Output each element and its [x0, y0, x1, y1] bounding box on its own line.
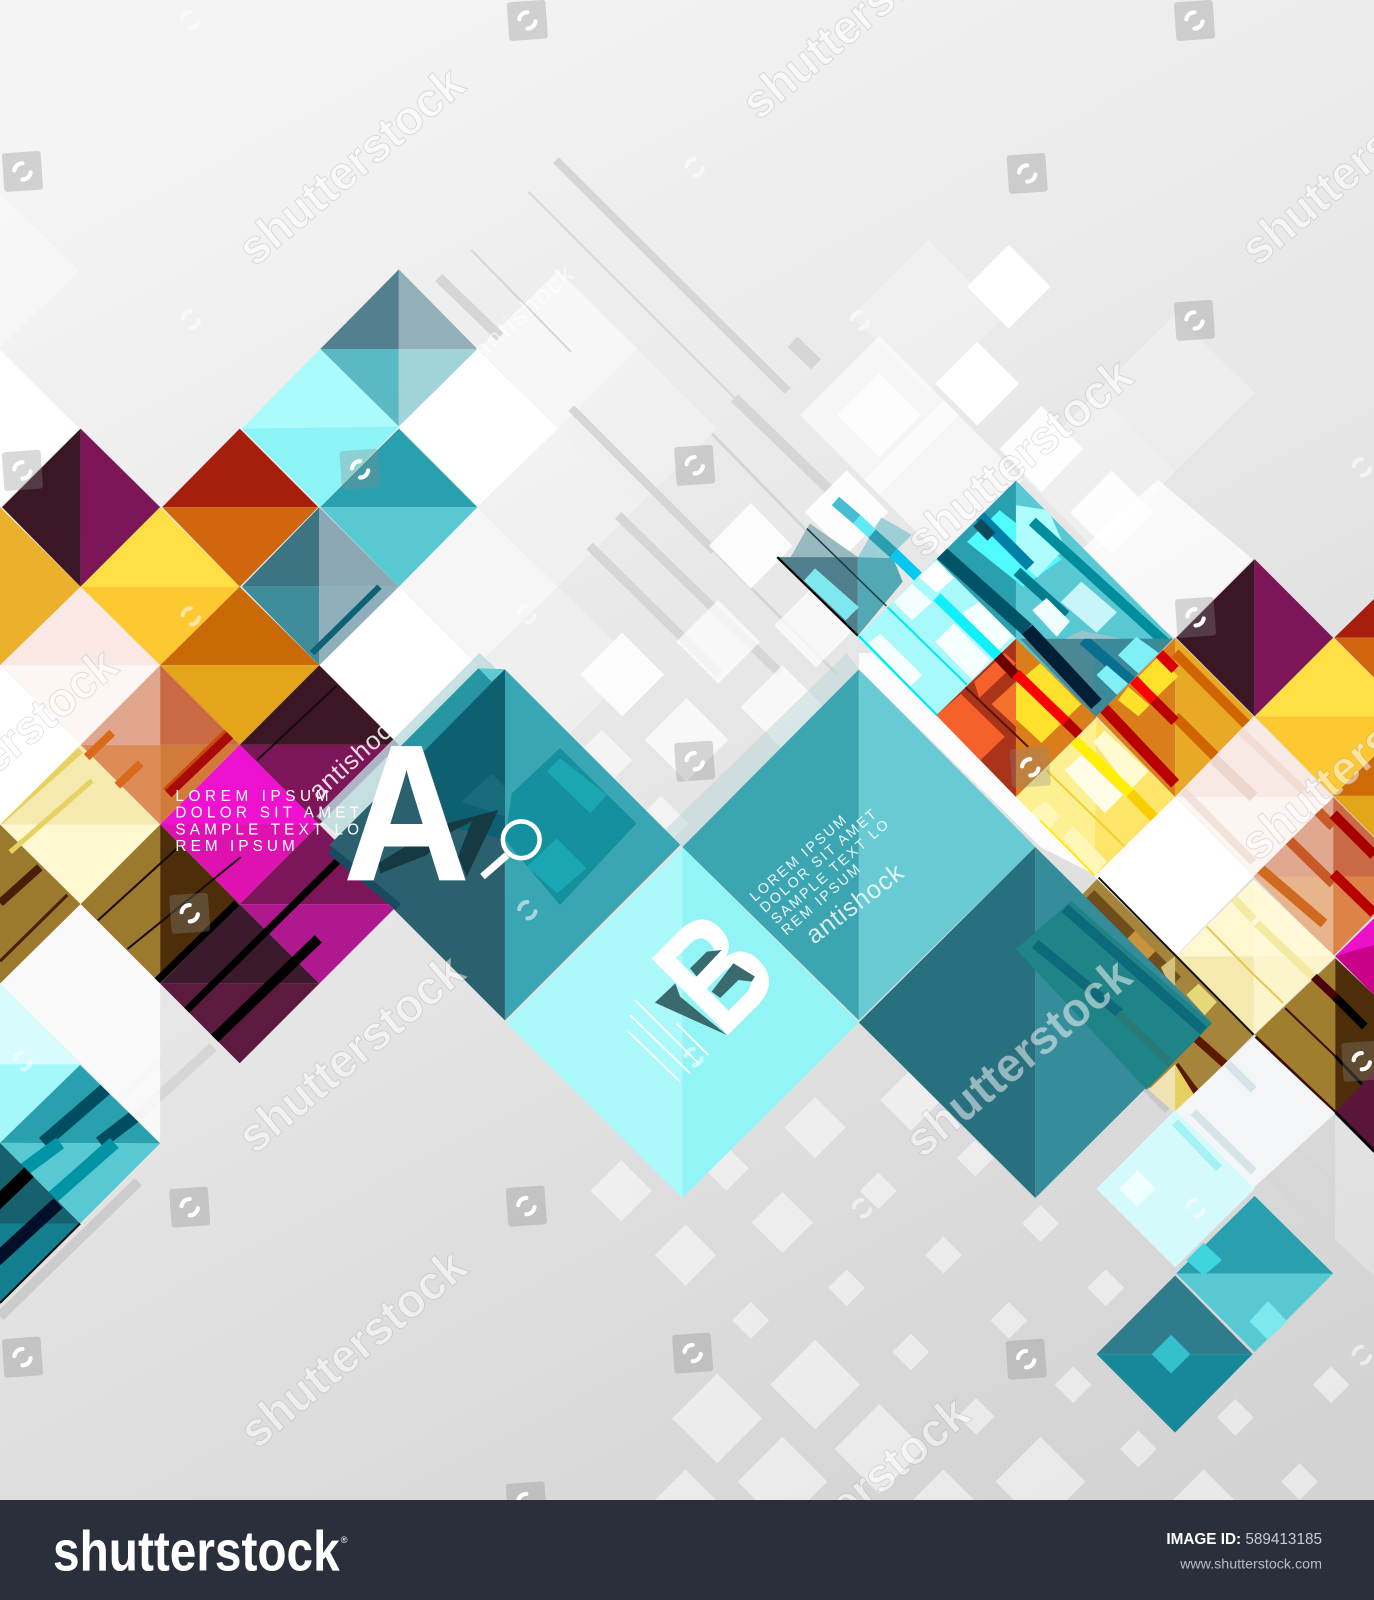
shutterstock watermarks: shutterstock [733, 1386, 980, 1600]
text block: lorem ipsum A [175, 788, 359, 855]
antishock marks: antishock [304, 708, 407, 805]
footer image id: IMAGE ID: 589413185 [1166, 1531, 1322, 1548]
diagonal grey lines [0, 160, 1374, 1316]
diamond: purple [2, 429, 160, 587]
text block: lorem ipsum B: DOLOR SIT AMET [757, 805, 881, 916]
diamond: white translucent right [1173, 1037, 1335, 1188]
footer registered mark: ® [341, 1535, 348, 1545]
diamond: brown right [1255, 958, 1374, 1153]
letter A: A [344, 705, 469, 921]
diamond: dark plum [160, 904, 319, 1063]
text block: lorem ipsum A: LOREM IPSUM [175, 788, 328, 805]
diamond: grey teal [242, 507, 399, 665]
diamond: brown striped behind teal [1020, 878, 1254, 1113]
diamond: pale pink right [1175, 716, 1333, 877]
diamond: teal [320, 429, 477, 587]
text block: lorem ipsum A: SAMPLE TEXT LO [175, 822, 359, 839]
small white diamonds, lower [591, 1069, 1350, 1531]
diamond: magenta [160, 745, 319, 904]
cluster: pale cyan diamond [857, 558, 1016, 716]
diamond: pale cyan right [1097, 1110, 1255, 1267]
diamond: red right [1334, 599, 1374, 678]
diamond: red orange [162, 429, 318, 587]
diamond: pale yellow right [1175, 880, 1335, 1035]
diamond A [329, 668, 680, 1020]
diamond: amber edge [0, 507, 81, 665]
panel A label [175, 705, 540, 921]
diamond: dark purple [240, 665, 399, 824]
shadow behind diamond A [316, 653, 510, 842]
diamond: orange red [936, 639, 1097, 797]
faint white background diamonds [0, 194, 1255, 745]
cluster: teal striped rectangle [936, 481, 1173, 717]
small white diamonds, upper [571, 245, 1154, 851]
panel B label [621, 805, 894, 1082]
B counter shadows [690, 950, 755, 998]
shutterstock watermarks: shutterstock [230, 1239, 477, 1458]
icon: magnifier [482, 821, 540, 877]
teal thin bar [312, 587, 379, 653]
decorative white lines [628, 1000, 708, 1082]
letter B: B [621, 877, 808, 1064]
diamond: salmon right [1254, 797, 1374, 956]
diamond: pale yellow cluster [1016, 718, 1175, 877]
cluster: grey teal with stripes [777, 501, 918, 636]
diamond: teal lower right [1176, 1196, 1333, 1352]
diamond: pale cyan [0, 984, 81, 1143]
footer logo: shutterstock [53, 1519, 340, 1582]
diamond: orange striped [1097, 638, 1254, 797]
diamond: pale yellow [0, 745, 160, 904]
shutterstock watermarks: shutterstock [228, 944, 475, 1164]
shutterstock watermarks: shutterstock [228, 57, 475, 276]
diamond: teal striped bottom-left [0, 1065, 160, 1303]
diamond: white translucent [0, 904, 160, 1143]
dark band under A [330, 850, 398, 907]
diamond: magenta lower [240, 824, 399, 984]
black edge lines [1099, 878, 1374, 1151]
diamond: pale pink [0, 587, 160, 745]
centre large diamonds [316, 653, 1212, 1198]
diamond: brown [0, 824, 240, 984]
shutterstock watermarks: shutterstock [895, 948, 1142, 1168]
diamond: yellow right [1255, 638, 1374, 796]
diamond: orange edge right [1333, 756, 1374, 837]
text block: lorem ipsum A: REM IPSUM [175, 838, 295, 855]
left diamond mosaic [0, 269, 477, 1303]
translucent white block right [1335, 1113, 1374, 1276]
diamond: salmon [81, 665, 240, 824]
antishock marks [304, 260, 909, 950]
diamond B [506, 847, 859, 1198]
diamond: white [1095, 797, 1254, 956]
footer url: www.shutterstock.com [1179, 1556, 1322, 1572]
white band above diamond C [859, 653, 1097, 876]
diamond: teal pyramid top [320, 269, 477, 427]
diamond: purple right [1176, 559, 1333, 716]
right diamond mosaic [777, 481, 1374, 1433]
shutterstock watermarks: shutterstock [896, 348, 1143, 568]
diamond D [859, 847, 1212, 1198]
left stripes [0, 653, 344, 1041]
letter B shadow [655, 983, 727, 1035]
text block: lorem ipsum B: SAMPLE TEXT LO [768, 816, 894, 928]
text block: lorem ipsum B: REM IPSUM [779, 860, 865, 939]
diamond: dark teal lower right [1097, 1276, 1253, 1433]
diamond C [682, 669, 1035, 1020]
diamond: cyan [242, 349, 399, 507]
dark teal corner [0, 1143, 80, 1303]
shadow behind diamond C [663, 653, 859, 847]
text block: lorem ipsum A: DOLOR SIT AMET [175, 804, 359, 821]
diamond: orange [160, 587, 319, 745]
antishock marks: antishock [801, 858, 909, 950]
icon shadow [378, 810, 498, 877]
white diamonds beside teal [319, 349, 558, 745]
footer bar [0, 1500, 1374, 1600]
white edge diamond [0, 665, 81, 824]
diamond: magenta edge [1335, 918, 1374, 995]
text block: lorem ipsum B: LOREM IPSUM [747, 811, 851, 905]
antishock marks: antishock [468, 260, 579, 365]
diamond: yellow [81, 507, 240, 665]
diamond: plum edge [1335, 1071, 1374, 1153]
